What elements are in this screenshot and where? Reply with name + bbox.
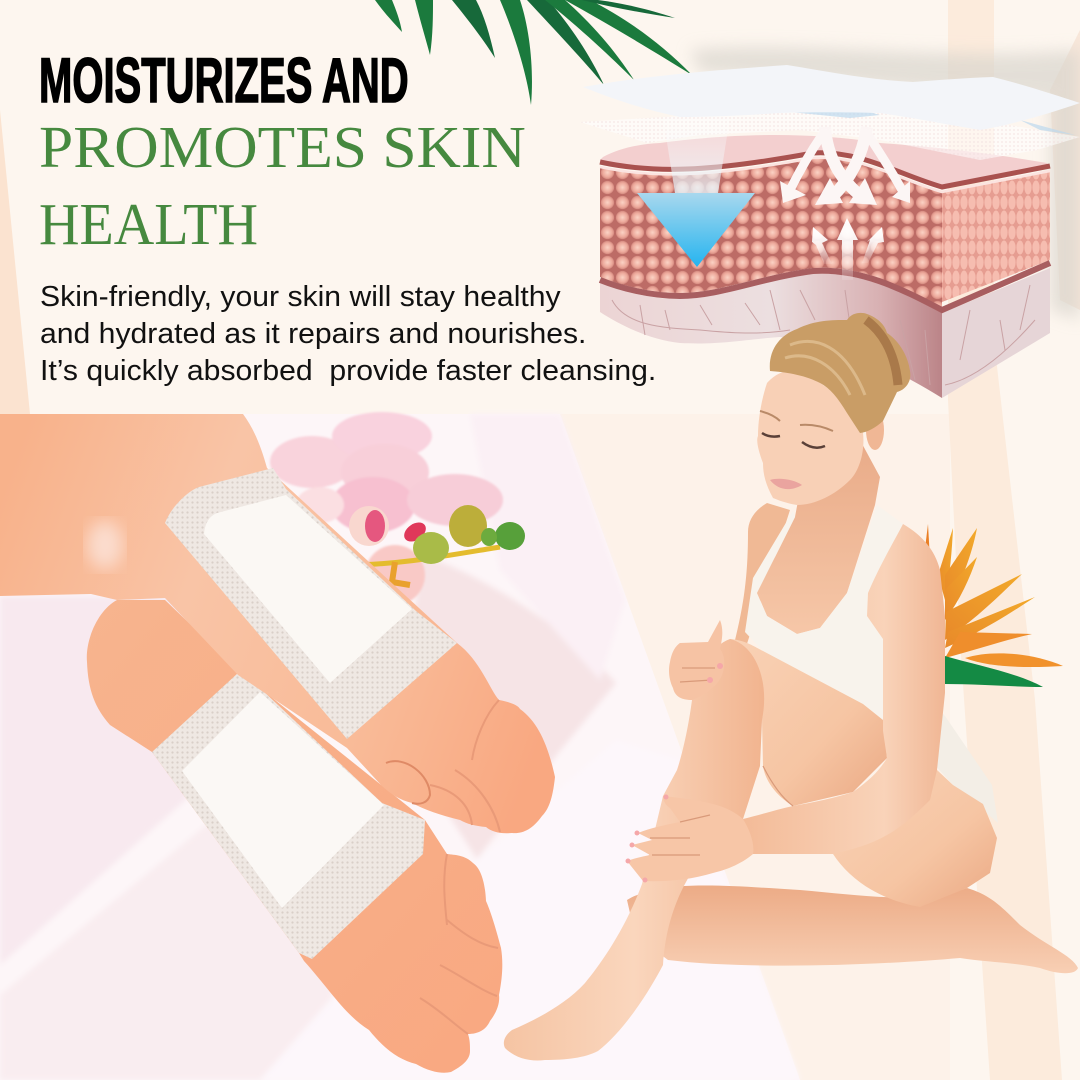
downward beam and blue drop (663, 117, 730, 193)
lower hand on shin (627, 796, 753, 881)
woman (504, 313, 1078, 1060)
title line 2: PROMOTES SKIN (39, 114, 526, 180)
thigh (730, 639, 887, 806)
upper band (600, 153, 1050, 187)
subcutaneous layer (600, 274, 942, 398)
lower foot (87, 600, 502, 1073)
body text: Skin-friendly, your skin will stay healthy (40, 281, 561, 313)
vessel lines (612, 285, 1035, 385)
tank top (745, 505, 903, 720)
palm leaves (375, 0, 692, 105)
briefs (930, 700, 998, 823)
photo panel: feet with detox patches on towels (0, 412, 800, 1080)
nails and joint details (650, 668, 793, 855)
skin layer diagram (580, 65, 1080, 398)
fat cells front (600, 159, 942, 307)
upper patch (165, 468, 457, 739)
hair (770, 313, 910, 433)
facial features (760, 411, 833, 489)
lower patch (152, 673, 425, 959)
title line 1: MOISTURIZES AND (39, 46, 409, 116)
towels (0, 414, 800, 1080)
shin and foot (504, 639, 764, 1060)
flowers and buds (270, 412, 525, 605)
body text: It’s quickly absorbed provide faster cleansing. (40, 355, 656, 387)
lower band (600, 263, 1050, 310)
face (757, 371, 863, 505)
back leg (627, 886, 1078, 973)
body text: and hydrated as it repairs and nourishes. (40, 318, 586, 350)
orange tropical leaf (920, 524, 1063, 687)
pink epidermis (600, 135, 1050, 188)
title line 3: HEALTH (39, 191, 258, 257)
left shoulder and arm behind (735, 503, 790, 650)
mesh sheet (580, 107, 1080, 160)
title: moisturizes and promotes skin health (39, 46, 526, 257)
upper foot (0, 414, 555, 833)
body text (40, 281, 656, 387)
white arrows (780, 127, 910, 205)
neck and chest (757, 440, 880, 634)
top sheet (583, 65, 1080, 130)
ear (866, 410, 884, 450)
fat cells side (942, 172, 1050, 302)
upper hand on knee (669, 620, 724, 700)
hip (833, 770, 997, 907)
right arm (743, 524, 945, 854)
